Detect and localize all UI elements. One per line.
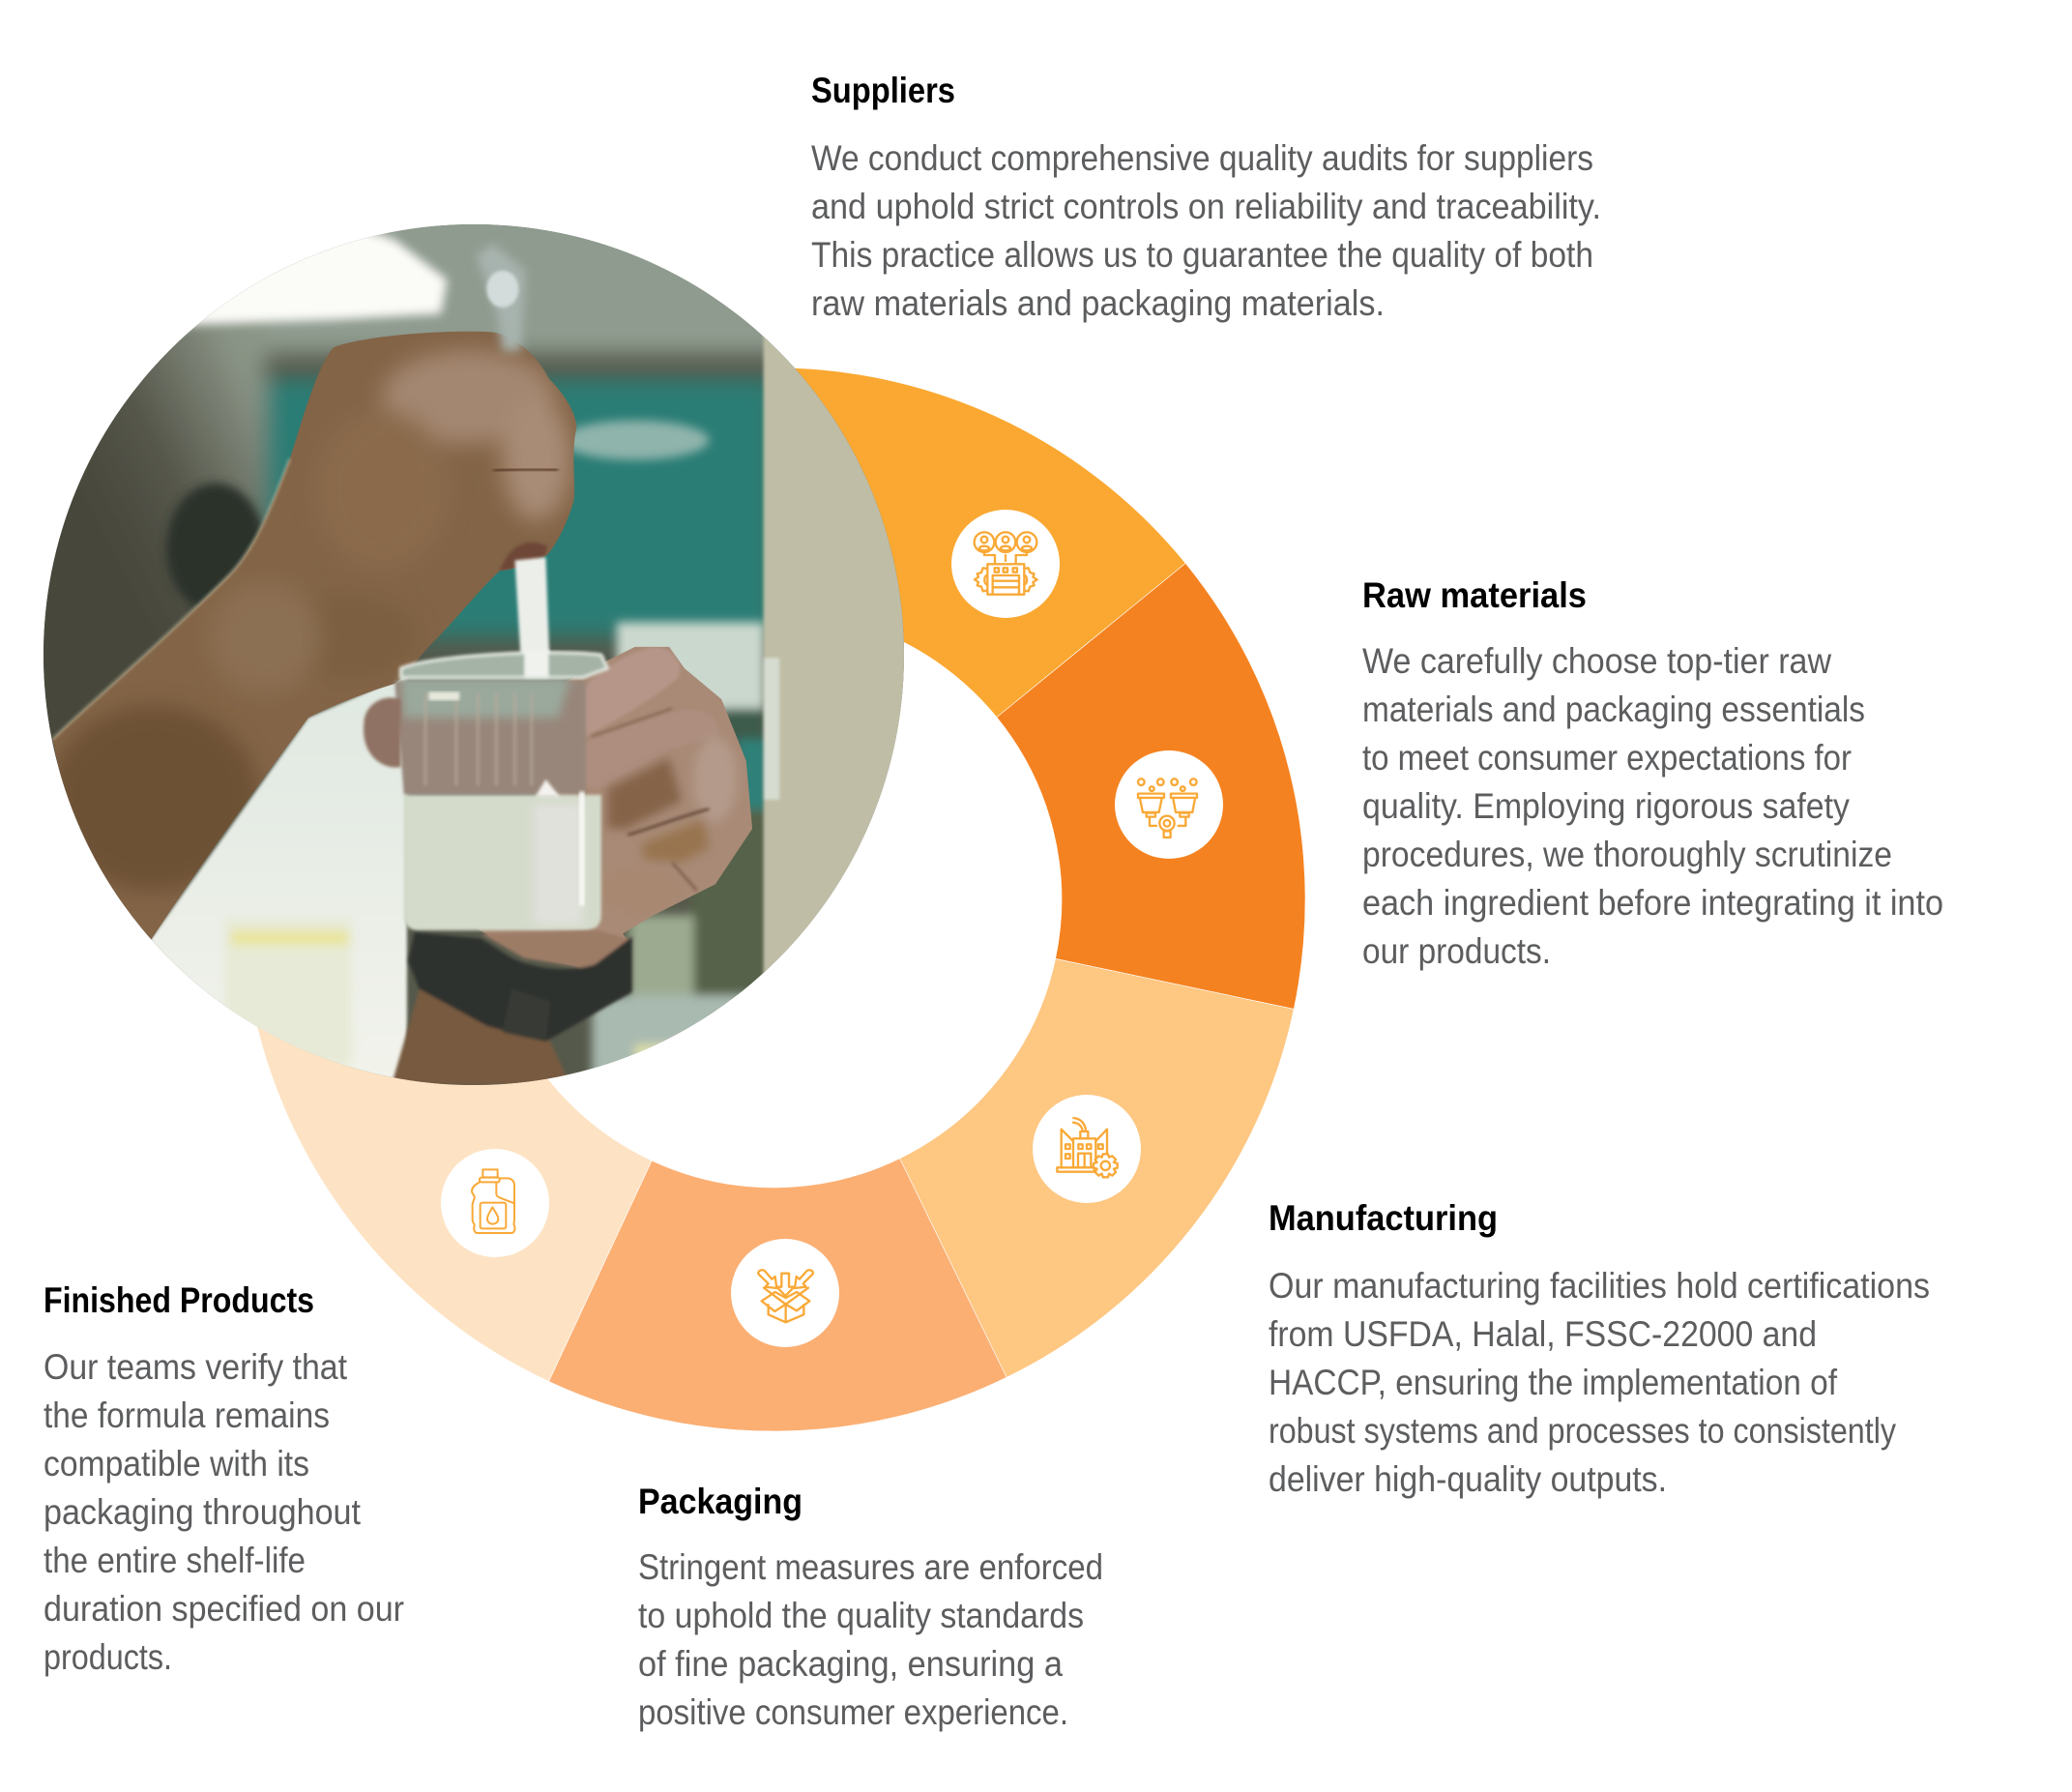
spoon bbox=[476, 244, 550, 674]
body: finished products: the entire shelf-life bbox=[44, 1541, 306, 1580]
right hand bbox=[478, 646, 752, 967]
body: raw materials: our products. bbox=[1362, 931, 1551, 971]
wrist and black watch bbox=[392, 930, 632, 1085]
white lab coat bbox=[151, 677, 410, 1079]
body: packaging: Stringent measures are enforced bbox=[638, 1547, 1103, 1587]
donut ring of five process segments bbox=[242, 367, 1305, 1431]
icon badge: manufacturing bbox=[1033, 1095, 1141, 1203]
light halo along the forearm bbox=[52, 458, 290, 739]
body: packaging: to uphold the quality standards bbox=[638, 1596, 1084, 1635]
body: raw materials: procedures, we thoroughly scrutinize bbox=[1362, 835, 1892, 874]
body: suppliers: and uphold strict controls on reliability and traceability. bbox=[811, 187, 1601, 226]
body: manufacturing: from USFDA, Halal, FSSC-22000 and bbox=[1269, 1314, 1817, 1354]
body: packaging: positive consumer experience. bbox=[638, 1692, 1068, 1732]
segment: manufacturing bbox=[900, 958, 1294, 1377]
heading: suppliers: Suppliers bbox=[811, 71, 955, 110]
ceiling light bbox=[190, 232, 452, 332]
icon badge: finished products bbox=[441, 1149, 549, 1257]
segment: suppliers bbox=[681, 367, 1185, 718]
body: finished products: Our teams verify that bbox=[44, 1347, 348, 1387]
text block: manufacturing bbox=[1269, 1198, 1930, 1499]
body: suppliers: raw materials and packaging materials. bbox=[811, 283, 1385, 323]
body: finished products: compatible with its bbox=[44, 1444, 309, 1484]
text block: raw materials bbox=[1362, 575, 1943, 971]
text block: packaging bbox=[638, 1482, 1103, 1732]
segment: raw materials bbox=[997, 563, 1305, 1009]
white fade at the lower-left rim bbox=[62, 952, 382, 1101]
icon badge: raw materials bbox=[1115, 750, 1223, 859]
body: finished products bbox=[44, 1347, 404, 1677]
left arm and hand bbox=[52, 331, 576, 940]
body: manufacturing: deliver high-quality outputs. bbox=[1269, 1459, 1667, 1499]
body: manufacturing: Our manufacturing facilities hold certifications bbox=[1269, 1266, 1930, 1306]
body: raw materials: quality. Employing rigorous safety bbox=[1362, 786, 1850, 826]
icon badge: packaging bbox=[731, 1239, 839, 1347]
body: manufacturing bbox=[1269, 1266, 1930, 1499]
body: packaging bbox=[638, 1547, 1103, 1732]
body: raw materials bbox=[1362, 641, 1943, 971]
text block: suppliers bbox=[811, 71, 1601, 323]
heading: finished products: Finished Products bbox=[44, 1280, 314, 1320]
segment: packaging bbox=[549, 1159, 1007, 1431]
body: manufacturing: HACCP, ensuring the implementation of bbox=[1269, 1363, 1838, 1402]
heading: raw materials: Raw materials bbox=[1362, 575, 1587, 615]
body: finished products: products. bbox=[44, 1637, 172, 1677]
icon badge: suppliers bbox=[951, 510, 1060, 618]
body: suppliers: This practice allows us to guarantee the quality of both bbox=[811, 235, 1593, 275]
body: raw materials: to meet consumer expectations for bbox=[1362, 738, 1852, 778]
body: raw materials: each ingredient before integrating it into bbox=[1362, 883, 1943, 923]
body: suppliers: We conduct comprehensive quality audits for suppliers bbox=[811, 138, 1593, 178]
heading: manufacturing: Manufacturing bbox=[1269, 1198, 1498, 1238]
segment: finished products bbox=[242, 807, 652, 1381]
heading: packaging: Packaging bbox=[638, 1482, 803, 1521]
body: manufacturing: robust systems and processes to consistently bbox=[1269, 1411, 1896, 1451]
body: raw materials: materials and packaging essentials bbox=[1362, 690, 1865, 729]
body: packaging: of fine packaging, ensuring a bbox=[638, 1644, 1063, 1684]
body: finished products: packaging throughout bbox=[44, 1492, 362, 1532]
body: suppliers bbox=[811, 138, 1601, 323]
beige right panel bbox=[761, 336, 904, 975]
body: raw materials: We carefully choose top-tier raw bbox=[1362, 641, 1831, 681]
glass beaker bbox=[364, 650, 607, 930]
circular photo: hands stirring liquid in a glass beaker bbox=[44, 224, 904, 1085]
text block: finished products bbox=[44, 1280, 404, 1677]
blurred bottle bbox=[225, 918, 352, 1066]
body: finished products: duration specified on our bbox=[44, 1589, 404, 1629]
body: finished products: the formula remains bbox=[44, 1395, 330, 1435]
